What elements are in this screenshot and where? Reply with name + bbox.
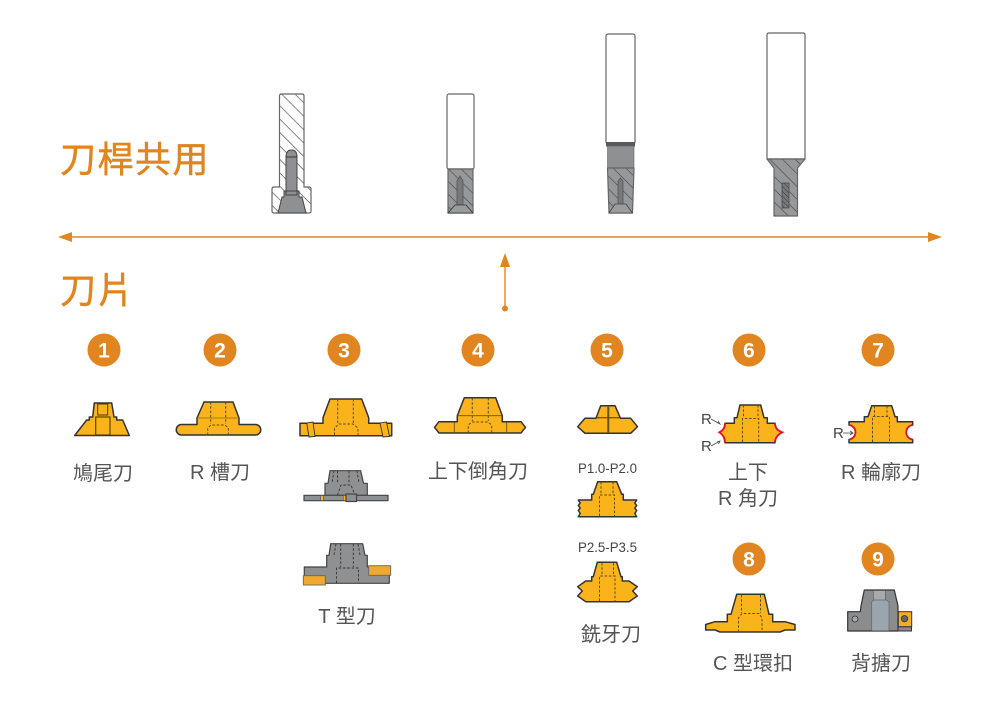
insert 5a: thread mill: [578, 406, 638, 433]
badge 9: [862, 542, 894, 576]
badge 5: [590, 334, 624, 366]
holder 1: [272, 94, 311, 213]
insert 6: upper lower R: [701, 405, 782, 455]
badge 6: 6: [743, 340, 755, 362]
R callout: R: [833, 425, 844, 442]
badge 9: 9: [872, 548, 884, 572]
badge 3: 3: [338, 340, 350, 362]
R callouts: R: [701, 411, 712, 428]
R callouts: R: [701, 438, 712, 455]
pitch label P2.5-P3.5: P2.5-P3.5: [578, 540, 637, 555]
up arrow: [500, 253, 510, 312]
holder 4: [767, 33, 805, 216]
label 4: 上下倒角刀: [428, 460, 528, 483]
insert 4: chamfer: [434, 398, 526, 433]
insert 3c: T slot gray wide: [303, 544, 391, 585]
label 1: 鳩尾刀: [73, 462, 133, 485]
label 7: R 輪廓刀: [841, 461, 921, 484]
double arrow: [58, 232, 942, 242]
insert 2: R groove: [176, 402, 261, 435]
insert 7: R profile: [833, 406, 913, 443]
badge 3: [328, 334, 360, 366]
insert 3a: T slot orange: [300, 399, 392, 437]
R callouts: [701, 411, 720, 455]
insert 1: dovetail: [75, 403, 129, 436]
badge 1: 1: [98, 340, 110, 362]
badge 5: 5: [601, 340, 613, 362]
badge 6: [732, 334, 766, 366]
badge 8: [732, 542, 766, 576]
title: 刀桿共用: 刀桿共用: [60, 139, 210, 180]
badge 1: [88, 334, 120, 366]
label 6b: R 角刀: [718, 487, 778, 510]
holder 2: [447, 94, 474, 213]
label 6: 上下: [728, 461, 768, 484]
badge 4: [462, 334, 494, 366]
insert 3b: T slot gray thin: [304, 471, 388, 502]
label 3: T 型刀: [318, 605, 376, 628]
badge 7: [862, 334, 894, 366]
badge 8: 8: [743, 548, 755, 572]
badge 2: 2: [214, 340, 226, 362]
badge 7: 7: [872, 340, 884, 362]
label 5: 銑牙刀: [581, 623, 641, 646]
label 9: 背搪刀: [851, 652, 911, 675]
pitch label P1.0-P2.0: P1.0-P2.0: [578, 461, 637, 476]
insert 8: C ring: [706, 594, 795, 632]
badge 4: 4: [472, 340, 484, 362]
insert 9: back chamfer: [848, 590, 912, 631]
holder 3: [606, 34, 635, 213]
insert 5c: coarse pitch: [578, 562, 637, 602]
badge 2: [204, 334, 236, 366]
heading: 刀片: 刀片: [60, 270, 135, 311]
insert 5b: fine pitch: [578, 482, 637, 517]
label 8: C 型環扣: [713, 652, 793, 675]
label 2: R 槽刀: [190, 461, 250, 484]
